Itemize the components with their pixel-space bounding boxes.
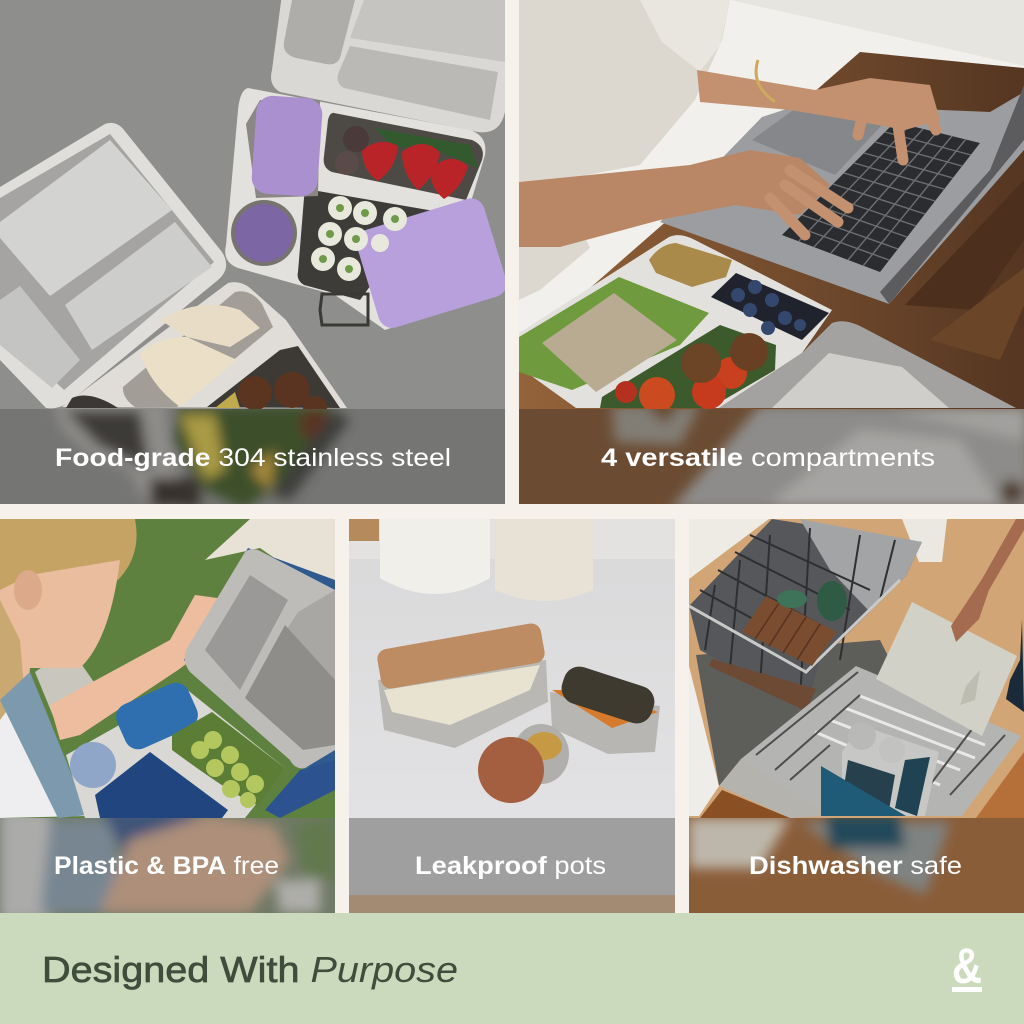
- icon: upper dish rack: [689, 519, 922, 711]
- caption band: dishwasher: [689, 815, 1024, 913]
- caption band: leakproof: [349, 818, 675, 913]
- footer heading: Designed With Purpose: [42, 949, 458, 990]
- icon: closed lid: [719, 321, 1016, 408]
- icon: blueberries: [731, 280, 806, 335]
- icon: grapes: [191, 731, 264, 808]
- panel: dishwasher safe: [689, 519, 1024, 913]
- panel: leakproof pots: [349, 519, 675, 913]
- icon: large steel container with tan lid: [376, 622, 548, 748]
- caption: Plastic & BPA free: Plastic & BPA free: [54, 852, 279, 880]
- icon: green pot: [817, 581, 847, 621]
- icon: white chopping board: [876, 602, 1017, 736]
- icon: tiny pot with terracotta lid: [478, 724, 569, 803]
- icon: bread slice: [542, 293, 677, 392]
- caption band: compartments: [519, 405, 1024, 510]
- icon: child clothing: [0, 712, 84, 818]
- icon: wood strip and jars: [349, 519, 379, 541]
- icon: child hair and face: [0, 519, 137, 720]
- icon: ampersand logo: &: [952, 938, 982, 994]
- icon: cabinets and floor: [689, 519, 769, 579]
- icon: lower left tray with pita: [62, 282, 347, 420]
- icon: light paving: [35, 666, 94, 718]
- panel: 4 versatile compartments: [519, 0, 1024, 510]
- icon: salad greens: [375, 128, 478, 168]
- icon: insulated bag and lid: [205, 519, 335, 580]
- footer band: [0, 913, 1024, 1024]
- icon: steel pans: [842, 725, 939, 816]
- caption: 4 versatile compartments: 4 versatile compartments: [601, 444, 935, 472]
- icon: large purple lid: [358, 198, 505, 328]
- icon: tray with blue lids: [66, 688, 285, 818]
- icon: arms and hands: [519, 70, 940, 247]
- caption: Leakproof pots: Leakproof pots: [415, 852, 606, 880]
- icon: person's arm and hand: [951, 519, 1024, 642]
- icon: falafel: [238, 376, 272, 410]
- icon: purple lid rectangle: [251, 95, 323, 197]
- icon: pita bread: [160, 305, 260, 347]
- caption band: plastic: [0, 818, 335, 913]
- icon: linen shirt: [519, 0, 730, 300]
- icon: sushi rolls: [311, 196, 407, 281]
- panel: plastic and BPA free: [0, 519, 335, 920]
- icon: open left lid: [0, 123, 226, 408]
- icon: open lunch tray with purple lids: [225, 88, 510, 331]
- caption: Dishwasher safe: Dishwasher safe: [749, 852, 962, 880]
- icon: bracelet: [756, 60, 775, 102]
- icon: upper lid of purple lunchbox: [271, 0, 505, 132]
- icon: tomatoes and falafel: [715, 357, 747, 389]
- panel: food-grade stainless steel: [0, 0, 510, 510]
- icon: laptop: [660, 85, 1024, 304]
- icon: brown silicone tray: [742, 596, 837, 666]
- icon: white furniture background: [730, 0, 1024, 66]
- icon: wooden desk: [519, 52, 1024, 409]
- icon: small steel container with brown lid: [550, 662, 660, 754]
- caption: Food-grade 304 stainless steel: Food-grade 304 stainless steel: [55, 444, 451, 472]
- icon: purple round lid: [235, 204, 293, 262]
- icon: open lunchbox with food: [519, 235, 1016, 413]
- caption band: food-grade: [0, 409, 505, 504]
- icon: strawberries: [362, 142, 468, 199]
- icon: lower dish rack: [741, 666, 1021, 816]
- icon: dishwasher interior: [696, 640, 900, 786]
- icon: blue silicone tray: [821, 766, 906, 816]
- icon: child arm: [50, 595, 232, 740]
